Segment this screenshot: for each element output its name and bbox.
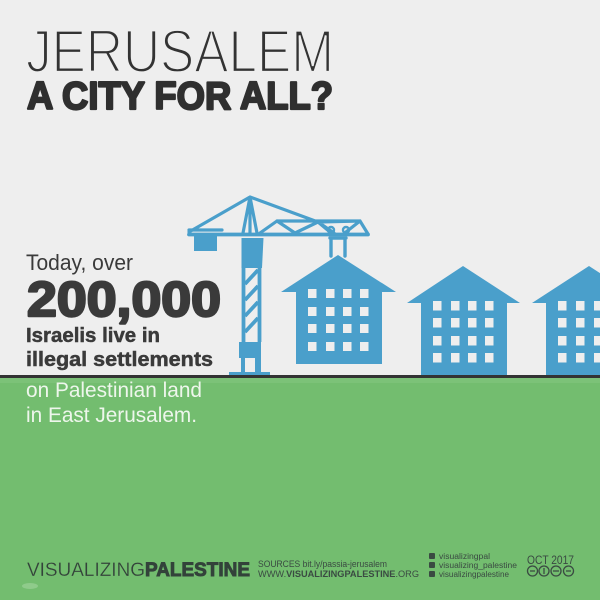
crane mast cab: [242, 238, 264, 268]
icons: creative commons licence: [528, 566, 574, 576]
icon: twitter square: [429, 553, 435, 559]
footer logo: [27, 560, 250, 581]
subtitle: A city for all?: A CITY FOR ALL?: [27, 75, 333, 118]
handle: visualizingpalestine: [439, 570, 510, 579]
title: [26, 18, 334, 118]
handle: visualizingpal: [439, 552, 490, 561]
footer sources: [258, 559, 419, 580]
icon: settlement building 3: [532, 266, 600, 376]
crane counterweight box: [194, 236, 217, 251]
text: on Palestinian land: on Palestinian land: [26, 379, 202, 402]
crane jib bar: [189, 233, 368, 236]
footer social handles: [429, 552, 518, 579]
ground line: [0, 375, 600, 378]
crane hoist: [330, 238, 346, 256]
text: in East Jerusalem: in East Jerusalem.: [26, 404, 197, 427]
text block: statistic above ground: [26, 250, 221, 371]
icon: lifted building: [281, 255, 396, 364]
text block: below ground: [26, 379, 202, 427]
website line: WWW.VISUALIZINGPALESTINE.ORG: [258, 569, 419, 580]
crane cables and truss: [189, 197, 368, 234]
title line: Jerusalem: JERUSALEM: [26, 18, 334, 85]
text: illegal settlements: illegal settlements: [26, 348, 213, 371]
icon: facebook square: [429, 571, 435, 577]
crane base: [229, 342, 270, 376]
sources line: SOURCES bit.ly/passia-jerusalem: [258, 559, 387, 570]
icon: construction crane: [189, 197, 368, 376]
big number: 200,000: [27, 273, 221, 327]
icon: settlement building 2: [407, 266, 520, 376]
logo word: Palestine: PALESTINE: [145, 560, 250, 581]
panel: green land: [0, 377, 600, 600]
logo word: Visualizing: VISUALIZING: [27, 560, 145, 581]
footer date: OCT 2017: [527, 553, 574, 567]
text: Israelis live in: Israelis live in: [26, 324, 160, 347]
crane lattice mast: [244, 266, 260, 342]
icon: instagram square: [429, 562, 435, 568]
text: today, over: Today, over: [26, 250, 133, 275]
handle: visualizing_palestine: [439, 561, 518, 570]
